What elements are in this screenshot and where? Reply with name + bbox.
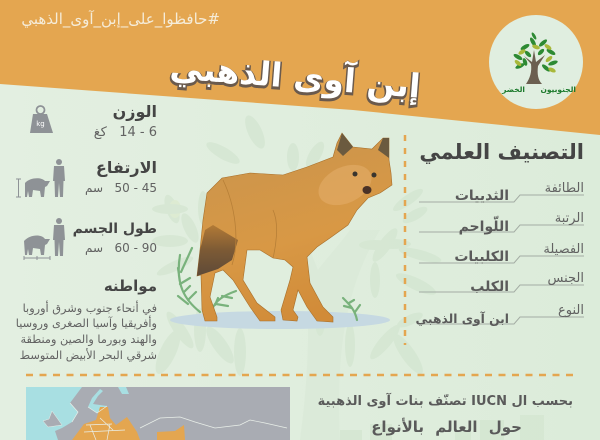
wolf [197,133,392,322]
value: 6 - 14 كغ [94,125,157,140]
heading: مواطنه [104,277,157,295]
heading: التصنيف العلمي [419,140,584,164]
uk [43,411,62,427]
IUCN statement: بحسب ال IUCN تصنّف بنات آوى الذهبية [318,392,573,409]
horizontal dashed divider [26,374,577,376]
logo [489,15,583,109]
row lines [419,195,584,324]
panel: scientific classification: الثدييات [455,188,509,204]
tail [197,225,238,276]
icon: tree [513,32,558,84]
background leaves [151,113,544,440]
heading: طول الجسم [73,221,157,237]
IUCN second line: حول العالم بالأنواع [371,418,522,436]
rows [543,181,584,318]
panel: scientific classification: الكلبيات [454,249,509,265]
icon: animal and person [24,218,65,260]
value: 45 - 50 سم [85,181,157,195]
borders [70,403,287,440]
stat: body length [24,218,157,260]
heading: الارتفاع [96,158,157,177]
distribution map [26,387,290,440]
ground shadow [170,311,390,329]
paragraph: وأفريقيا وآسيا الصغرى وروسيا [16,315,157,331]
value: 90 - 60 سم [85,241,157,255]
vertical dashed divider [404,135,406,345]
face details [337,133,353,156]
plants [178,248,360,320]
paragraph: في أنحاء جنوب وشرق أوروبا [23,300,157,316]
stat: weight: kg [36,120,45,128]
native range text [16,277,157,363]
heading: الوزن [113,102,157,121]
panel: scientific classification [415,140,584,326]
icon: weight [30,106,53,133]
panel: scientific classification: اللّواحم [459,216,509,235]
logo text: الجنوبيون [540,85,576,94]
sea [26,387,82,440]
rows: الجنس [548,271,584,286]
stat: weight [30,102,157,140]
icon: animal and person [16,159,65,197]
title: إبن آوى الذهبي [168,46,422,107]
rows: النوع [558,303,584,318]
range [72,407,140,440]
stat: height [16,158,157,197]
panel: scientific classification: ابن آوى الذهبي [415,311,509,326]
hashtag: #حافظوا_على_إبن_آوى_الذهبي [21,10,220,29]
logo text [501,85,576,94]
header band [0,0,600,135]
rows: الطائفة [545,181,584,196]
paragraph [16,300,157,363]
logo text: الخضر [501,85,525,94]
rows: الفصيلة [543,242,584,257]
title: إبن آوى الذهبي [168,48,422,108]
chest highlight [312,157,378,213]
body [197,133,392,322]
paragraph: والهند وبورما والصين ومنطقة [20,333,157,347]
panel: scientific classification: الكلب [470,279,509,295]
rows: الرتبة [555,211,584,226]
paragraph: شرقي البحر الأبيض المتوسط [20,348,157,363]
